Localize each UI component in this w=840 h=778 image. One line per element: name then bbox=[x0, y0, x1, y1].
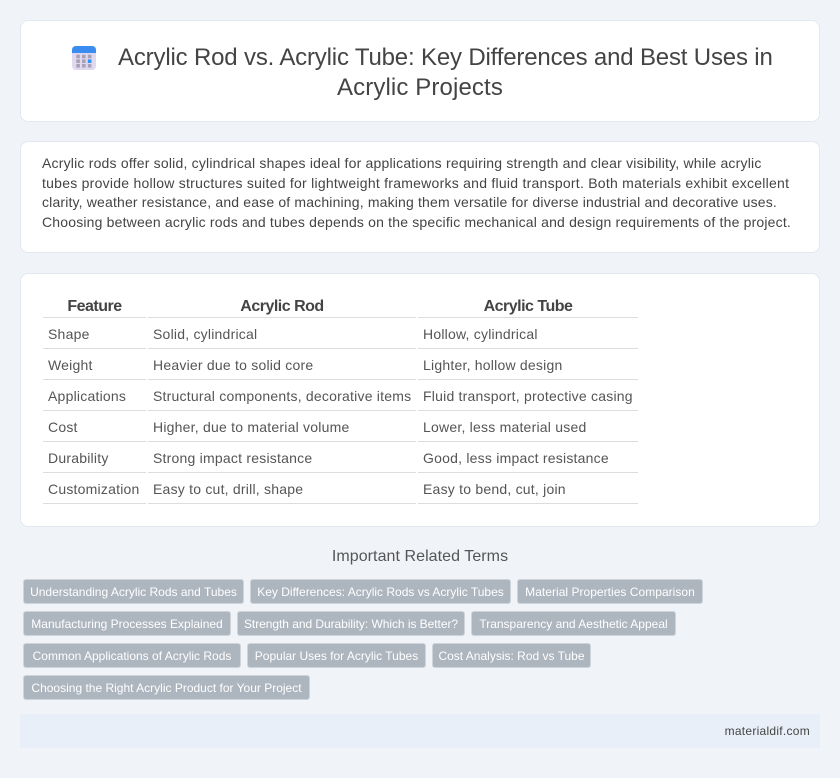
row: applications: Fluid transport, protective casing bbox=[423, 388, 633, 404]
title bbox=[118, 44, 773, 101]
row: customization: Easy to cut, drill, shape bbox=[153, 481, 303, 497]
tag: Key Differences: Acrylic Rods vs Acrylic Tubes bbox=[257, 585, 504, 599]
table header bbox=[67, 298, 572, 315]
summary paragraph: clarity, weather resistance, and ease of machining, making them versatile for diverse industrial and decorative uses. bbox=[42, 194, 777, 210]
row: applications: Structural components, decorative items bbox=[153, 388, 411, 404]
summary paragraph: Choosing between acrylic rods and tubes depends on the specific mechanical and design requirements of the project. bbox=[42, 214, 791, 230]
tag bbox=[23, 643, 241, 668]
table header: Acrylic Tube bbox=[484, 298, 572, 315]
tag bbox=[23, 611, 231, 636]
row: shape: Shape bbox=[48, 326, 90, 342]
tag: Manufacturing Processes Explained bbox=[31, 617, 223, 631]
row: durability bbox=[48, 450, 609, 466]
row: durability: Strong impact resistance bbox=[153, 450, 312, 466]
row: customization: Customization bbox=[48, 481, 140, 497]
tag bbox=[432, 643, 591, 668]
tag bbox=[247, 643, 426, 668]
tag: Transparency and Aesthetic Appeal bbox=[479, 617, 668, 631]
summary paragraph: tubes provide hollow structures suited for lightweight frameworks and fluid transport. Both materials exhibit excellent bbox=[42, 175, 789, 191]
tag: Material Properties Comparison bbox=[525, 585, 695, 599]
summary paragraph: Acrylic rods offer solid, cylindrical shapes ideal for applications requiring strength and clear visibility, while acrylic bbox=[42, 155, 762, 171]
row: applications: Applications bbox=[48, 388, 126, 404]
tag: Popular Uses for Acrylic Tubes bbox=[255, 649, 418, 663]
panel: comparison table bbox=[20, 273, 820, 527]
row: customization bbox=[48, 481, 566, 497]
tag bbox=[237, 611, 465, 636]
row: durability: Durability bbox=[48, 450, 109, 466]
row: weight bbox=[48, 357, 562, 373]
row: cost: Cost bbox=[48, 419, 78, 435]
row: durability: Good, less impact resistance bbox=[423, 450, 609, 466]
panel: title header bbox=[20, 20, 820, 122]
row: weight: Weight bbox=[48, 357, 93, 373]
table header: Feature bbox=[67, 298, 122, 315]
tag: Cost Analysis: Rod vs Tube bbox=[438, 649, 585, 663]
tag bbox=[250, 579, 511, 604]
row: applications bbox=[48, 388, 633, 404]
tag: Strength and Durability: Which is Better? bbox=[244, 617, 458, 631]
row: shape bbox=[48, 326, 538, 342]
tag: Choosing the Right Acrylic Product for Your Project bbox=[31, 681, 302, 695]
row: cost: Lower, less material used bbox=[423, 419, 586, 435]
tag: Understanding Acrylic Rods and Tubes bbox=[30, 585, 237, 599]
row: customization: Easy to bend, cut, join bbox=[423, 481, 566, 497]
icon: calendar bbox=[72, 46, 96, 70]
row: cost bbox=[48, 419, 586, 435]
heading: related terms: Important Related Terms bbox=[332, 548, 508, 565]
panel: summary text bbox=[20, 141, 820, 253]
row: cost: Higher, due to material volume bbox=[153, 419, 349, 435]
table header: Acrylic Rod bbox=[240, 298, 324, 315]
row: shape: Hollow, cylindrical bbox=[423, 326, 538, 342]
tag bbox=[23, 675, 310, 700]
title: Acrylic Projects bbox=[337, 74, 503, 101]
row: weight: Heavier due to solid core bbox=[153, 357, 313, 373]
tag: Common Applications of Acrylic Rods bbox=[33, 649, 231, 663]
summary paragraph bbox=[42, 155, 791, 230]
title: Acrylic Rod vs. Acrylic Tube: Key Differences and Best Uses in bbox=[118, 44, 773, 71]
tag bbox=[23, 579, 244, 604]
tag bbox=[471, 611, 676, 636]
panel: related term tags bbox=[23, 579, 703, 700]
tag bbox=[517, 579, 703, 604]
row: shape: Solid, cylindrical bbox=[153, 326, 257, 342]
footer bar bbox=[20, 714, 820, 748]
footer source text: materialdif.com bbox=[725, 724, 810, 738]
row: weight: Lighter, hollow design bbox=[423, 357, 562, 373]
